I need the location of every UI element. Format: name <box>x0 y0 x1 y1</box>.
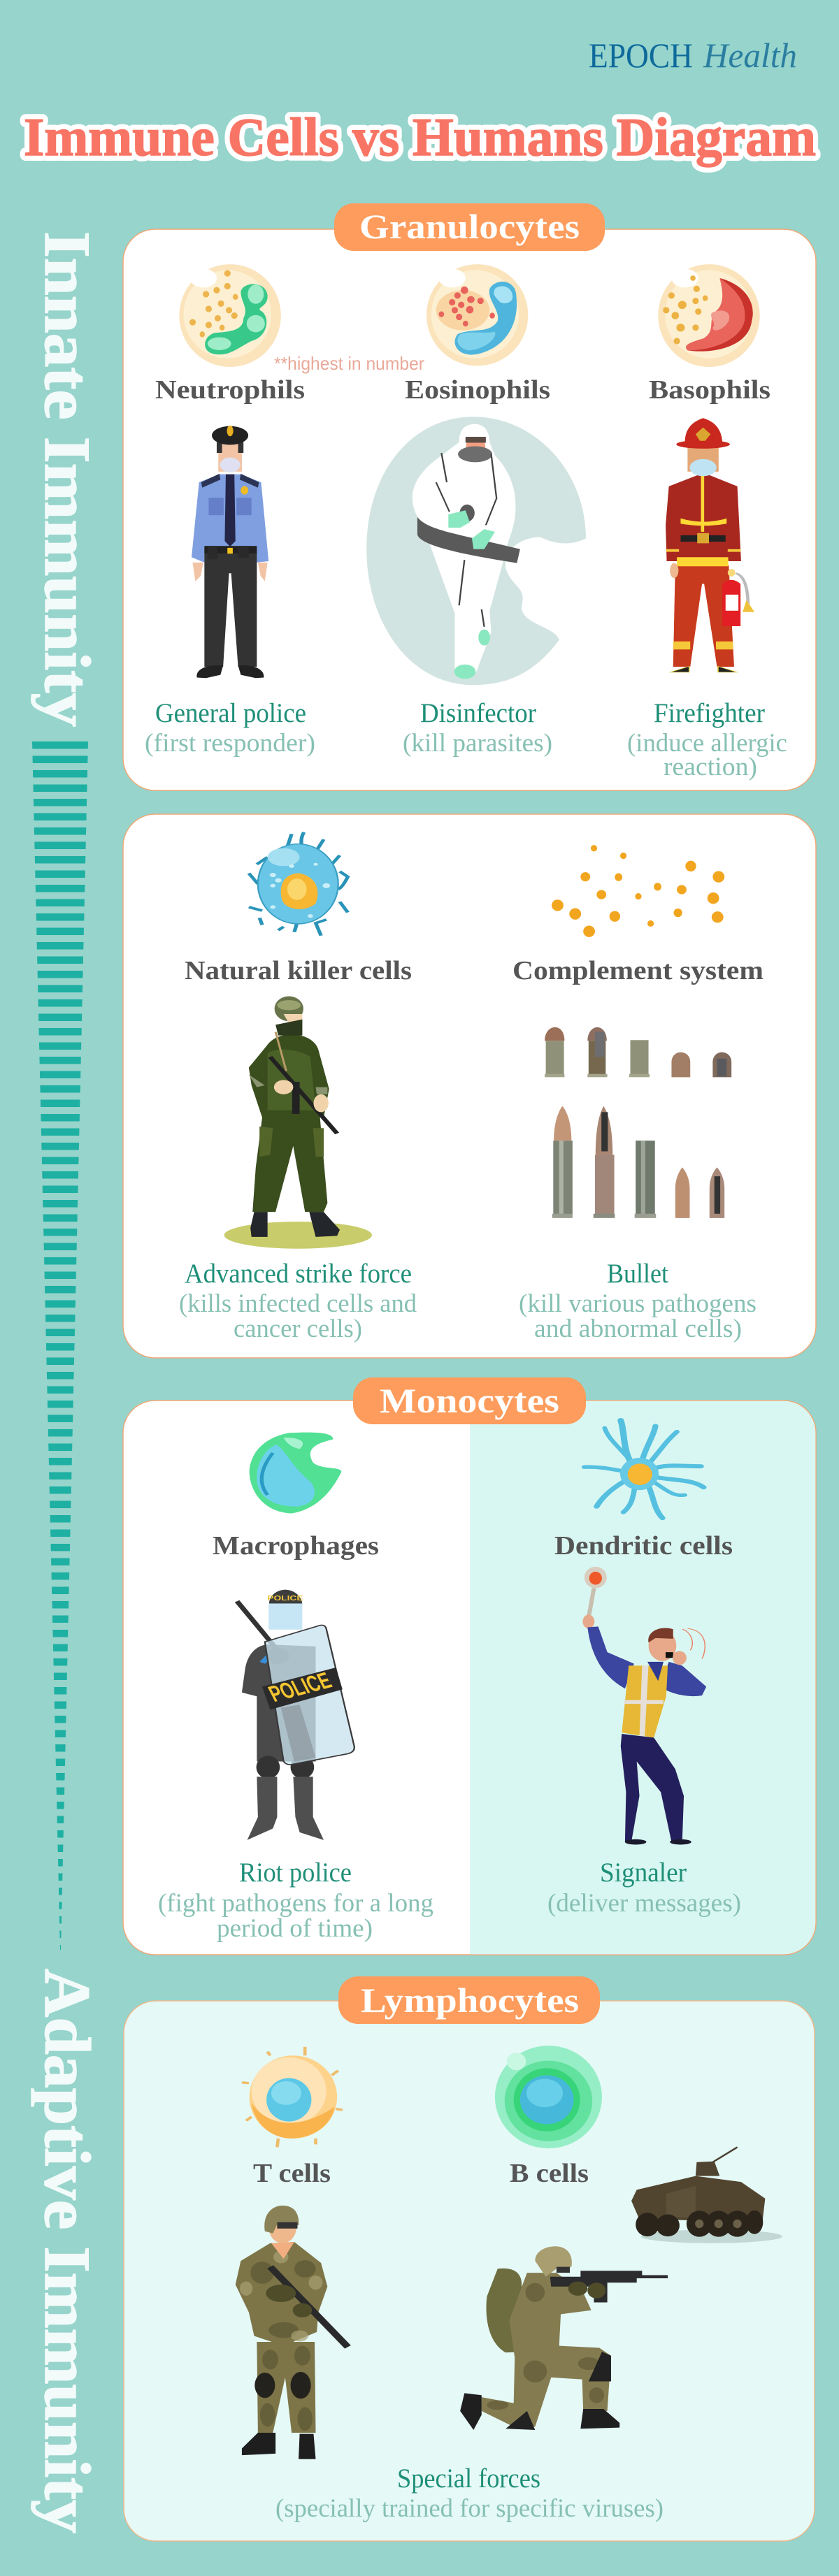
tapering striped divider <box>32 741 88 1950</box>
icon: macrophage <box>250 1433 341 1514</box>
icon: armored vehicle <box>631 2147 782 2243</box>
role: Firefighter: (induce allergic <box>627 729 787 758</box>
role: Special forces: Special forces <box>397 2463 540 2494</box>
label: Basophils: Basophils <box>649 375 770 405</box>
role: General police: General police <box>155 698 306 728</box>
role: Special forces: (specially trained for specific viruses) <box>275 2494 664 2523</box>
figure: riot police with shield <box>237 1590 354 1840</box>
role: Bullet: (kill various pathogens <box>519 1289 756 1318</box>
note: highest in number: **highest in number <box>274 353 424 374</box>
role: General police <box>145 698 315 758</box>
icon: basophil cell <box>658 264 760 367</box>
panel: natural killer cells and complement system <box>123 814 816 1358</box>
heading: Lymphocytes <box>338 1976 600 2024</box>
label: Complement system: Complement system <box>512 956 763 985</box>
panel: granulocytes <box>123 203 816 790</box>
panel: monocytes <box>123 1377 816 1955</box>
figure: strike force soldier <box>224 997 372 1249</box>
role: Bullet <box>519 1259 756 1343</box>
role: Riot police: period of time) <box>217 1914 373 1943</box>
label: Macrophages: Macrophages <box>213 1531 379 1561</box>
title: Immune Cells vs Humans Diagram <box>24 107 816 167</box>
icon: bullets <box>545 1027 731 1218</box>
role: Riot police <box>158 1858 433 1943</box>
role: Firefighter: Firefighter <box>654 698 765 728</box>
title: Immune Cells vs Humans Diagram <box>24 107 816 167</box>
role: Disinfector: Disinfector <box>420 698 536 728</box>
figure: police officer <box>192 426 268 678</box>
role: Signaler: Signaler <box>600 1858 687 1888</box>
role: Firefighter <box>627 698 787 781</box>
figure: standing soldier <box>236 2206 347 2459</box>
icon: B cell <box>495 2046 602 2148</box>
heading: Granulocytes <box>334 203 605 251</box>
icon: natural killer cell <box>249 832 347 936</box>
role: Advanced strike force: Advanced strike force <box>185 1259 412 1289</box>
role: Riot police: (fight pathogens for a long <box>158 1889 433 1918</box>
heading: Monocytes: Monocytes <box>380 1381 559 1420</box>
side label: Adaptive Immunity: Adaptive Immunity <box>31 1969 103 2533</box>
icon: T cell <box>242 2047 343 2147</box>
role: Advanced strike force <box>179 1259 417 1343</box>
logo: Epoch Health: EPOCH <box>589 36 693 75</box>
label: B cells: B cells <box>510 2159 589 2188</box>
logo: Epoch Health <box>589 36 797 75</box>
role: Disinfector <box>403 698 552 758</box>
side label: Innate Immunity: Innate Immunity <box>31 231 103 727</box>
role: Firefighter: reaction) <box>664 753 757 781</box>
figure: disinfector in protective suit <box>366 417 586 685</box>
label: Natural killer cells: Natural killer cells <box>185 956 412 985</box>
label: Dendritic cells: Dendritic cells <box>554 1531 733 1561</box>
heading: Monocytes <box>353 1377 586 1424</box>
role: Bullet: Bullet <box>607 1259 668 1289</box>
role: Advanced strike force: cancer cells) <box>234 1315 362 1343</box>
icon: eosinophil cell <box>426 264 528 366</box>
icon: complement system particles <box>552 845 724 937</box>
role: Advanced strike force: (kills infected cells and <box>179 1289 417 1318</box>
logo: Epoch Health: Health <box>703 36 797 75</box>
role: Disinfector: (kill parasites) <box>403 729 552 758</box>
panel: lymphocytes <box>124 1976 815 2541</box>
figure: signaler with whistle and paddle <box>582 1567 706 1844</box>
role: Signaler: (deliver messages) <box>547 1889 741 1918</box>
label: Neutrophils: Neutrophils <box>155 375 305 405</box>
heading: Granulocytes: Granulocytes <box>359 207 580 246</box>
figure: kneeling soldier with rifle <box>460 2246 668 2430</box>
role: Signaler <box>547 1858 741 1918</box>
icon: dendritic cell <box>585 1420 703 1518</box>
role: General police: (first responder) <box>145 729 315 758</box>
figure: riot police with shield: POLICE <box>264 1667 336 1707</box>
figure: firefighter <box>666 418 754 672</box>
role: Bullet: and abnormal cells) <box>534 1315 742 1343</box>
role: Riot police: Riot police <box>239 1858 352 1888</box>
heading: Lymphocytes: Lymphocytes <box>361 1981 579 2020</box>
icon: neutrophil cell <box>179 264 281 367</box>
role: Special forces <box>275 2463 664 2523</box>
figure: riot police with shield: POLICE <box>267 1594 303 1602</box>
label: T cells: T cells <box>253 2159 331 2188</box>
label: Eosinophils: Eosinophils <box>405 375 550 405</box>
